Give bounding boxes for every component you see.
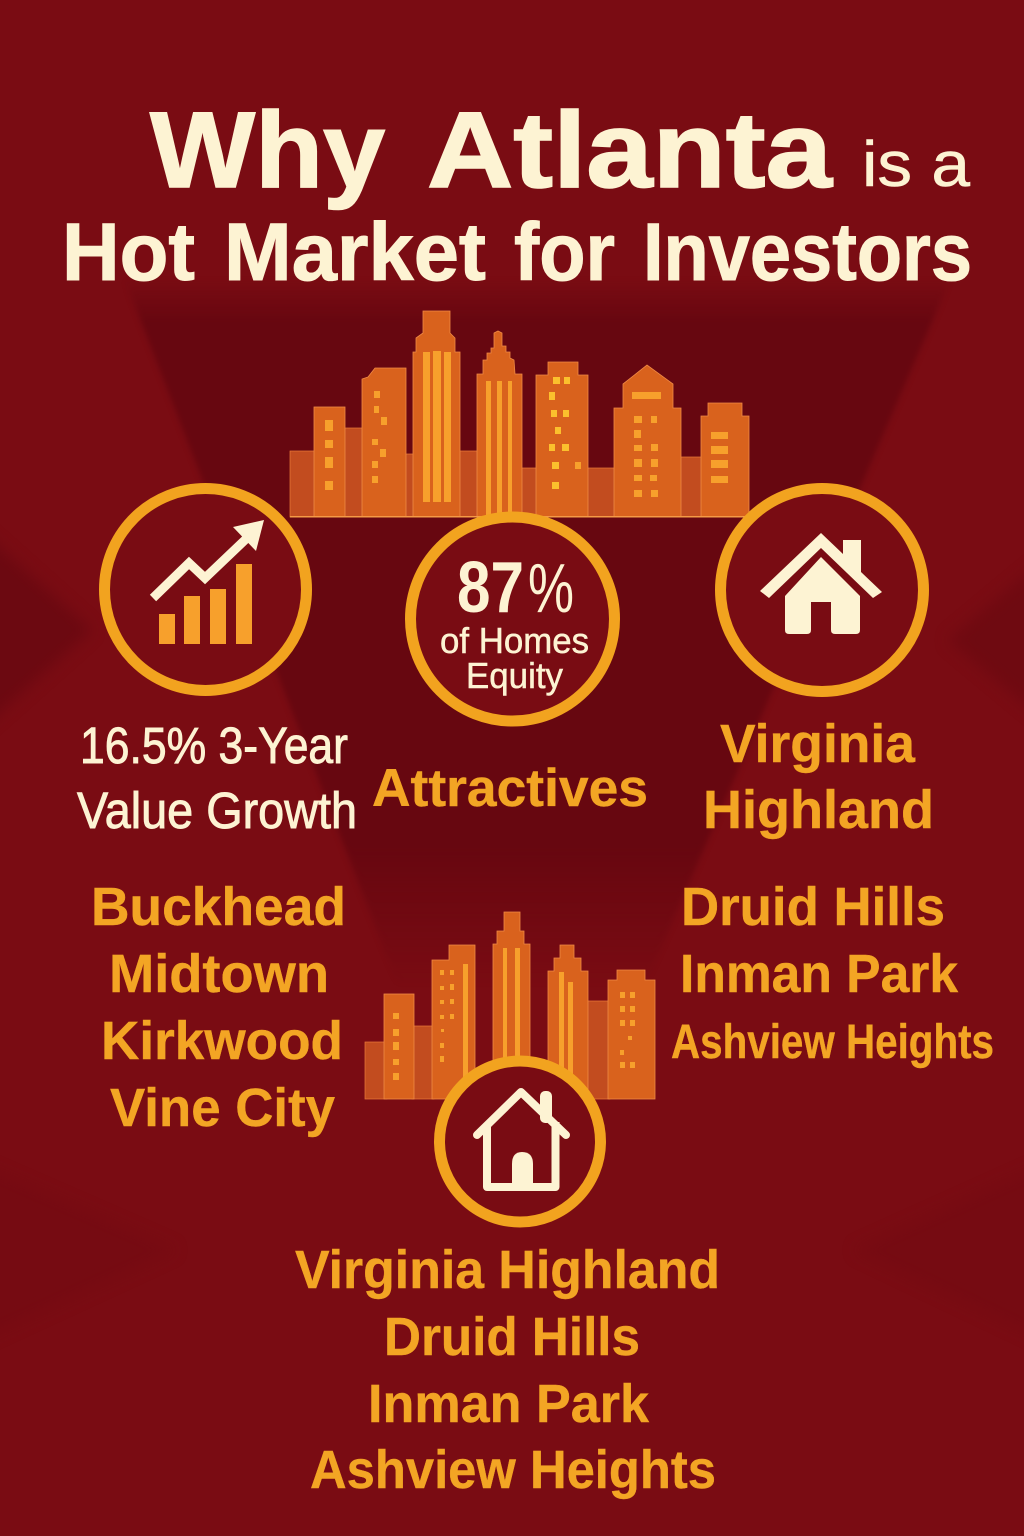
label: Virginia Highland: Highland bbox=[703, 780, 934, 840]
neighborhood list: bottom: Druid Hills bbox=[384, 1307, 640, 1367]
label: 16.5% 3-Year Value Growth: 16.5% 3-Year bbox=[80, 717, 348, 774]
title bbox=[62, 89, 972, 298]
title line 2: Market bbox=[224, 207, 486, 298]
neighborhood list: right: Inman Park bbox=[680, 944, 959, 1004]
neighborhood list: bottom bbox=[295, 1240, 720, 1500]
stat: value growth bbox=[77, 488, 357, 839]
neighborhood list: left bbox=[91, 877, 346, 1138]
neighborhood list: right bbox=[671, 877, 994, 1069]
icon: house circle bbox=[720, 488, 924, 692]
circle: 87% of homes equity: % bbox=[528, 549, 574, 627]
circle: 87% of homes equity: 87 bbox=[457, 548, 524, 628]
label: Virginia Highland: Virginia bbox=[720, 714, 916, 774]
neighborhood list: left: Midtown bbox=[109, 944, 329, 1004]
lower city skyline bbox=[365, 912, 655, 1099]
label: Attractives: Attractives bbox=[372, 759, 648, 818]
circle: 87% of homes equity bbox=[410, 517, 614, 721]
title line 1: Atlanta bbox=[427, 89, 833, 210]
neighborhood list: bottom: Inman Park bbox=[368, 1374, 650, 1434]
icon: growth chart circle bbox=[104, 488, 306, 690]
label: Virginia Highland bbox=[703, 714, 934, 840]
title line 1 bbox=[150, 89, 970, 210]
title line 2 bbox=[62, 207, 972, 298]
icon: house outline circle bbox=[440, 1061, 600, 1222]
neighborhood list: left: Buckhead bbox=[91, 877, 346, 937]
label: 16.5% 3-Year Value Growth: Value Growth bbox=[77, 782, 357, 839]
neighborhood list: right: Druid Hills bbox=[681, 877, 945, 937]
neighborhood list: bottom: Ashview Heights bbox=[310, 1440, 716, 1500]
neighborhood list: left: Kirkwood bbox=[101, 1011, 343, 1071]
circle: 87% of homes equity: Equity bbox=[466, 655, 563, 696]
title line 2: for bbox=[514, 207, 615, 298]
title line 1: is a bbox=[862, 128, 970, 200]
title line 2: Investors bbox=[643, 207, 972, 298]
top city skyline bbox=[290, 311, 749, 518]
neighborhood list: left: Vine City bbox=[110, 1078, 335, 1138]
neighborhood list: bottom: Virginia Highland bbox=[295, 1240, 720, 1300]
circle: 87% of homes equity: of Homes bbox=[440, 620, 589, 661]
stat: home equity bbox=[372, 517, 648, 818]
label: 16.5% 3-Year Value Growth bbox=[77, 717, 357, 839]
title line 2: Hot bbox=[62, 207, 195, 298]
stat: Virginia Highland bbox=[703, 488, 934, 840]
title line 1: Why bbox=[150, 89, 385, 210]
